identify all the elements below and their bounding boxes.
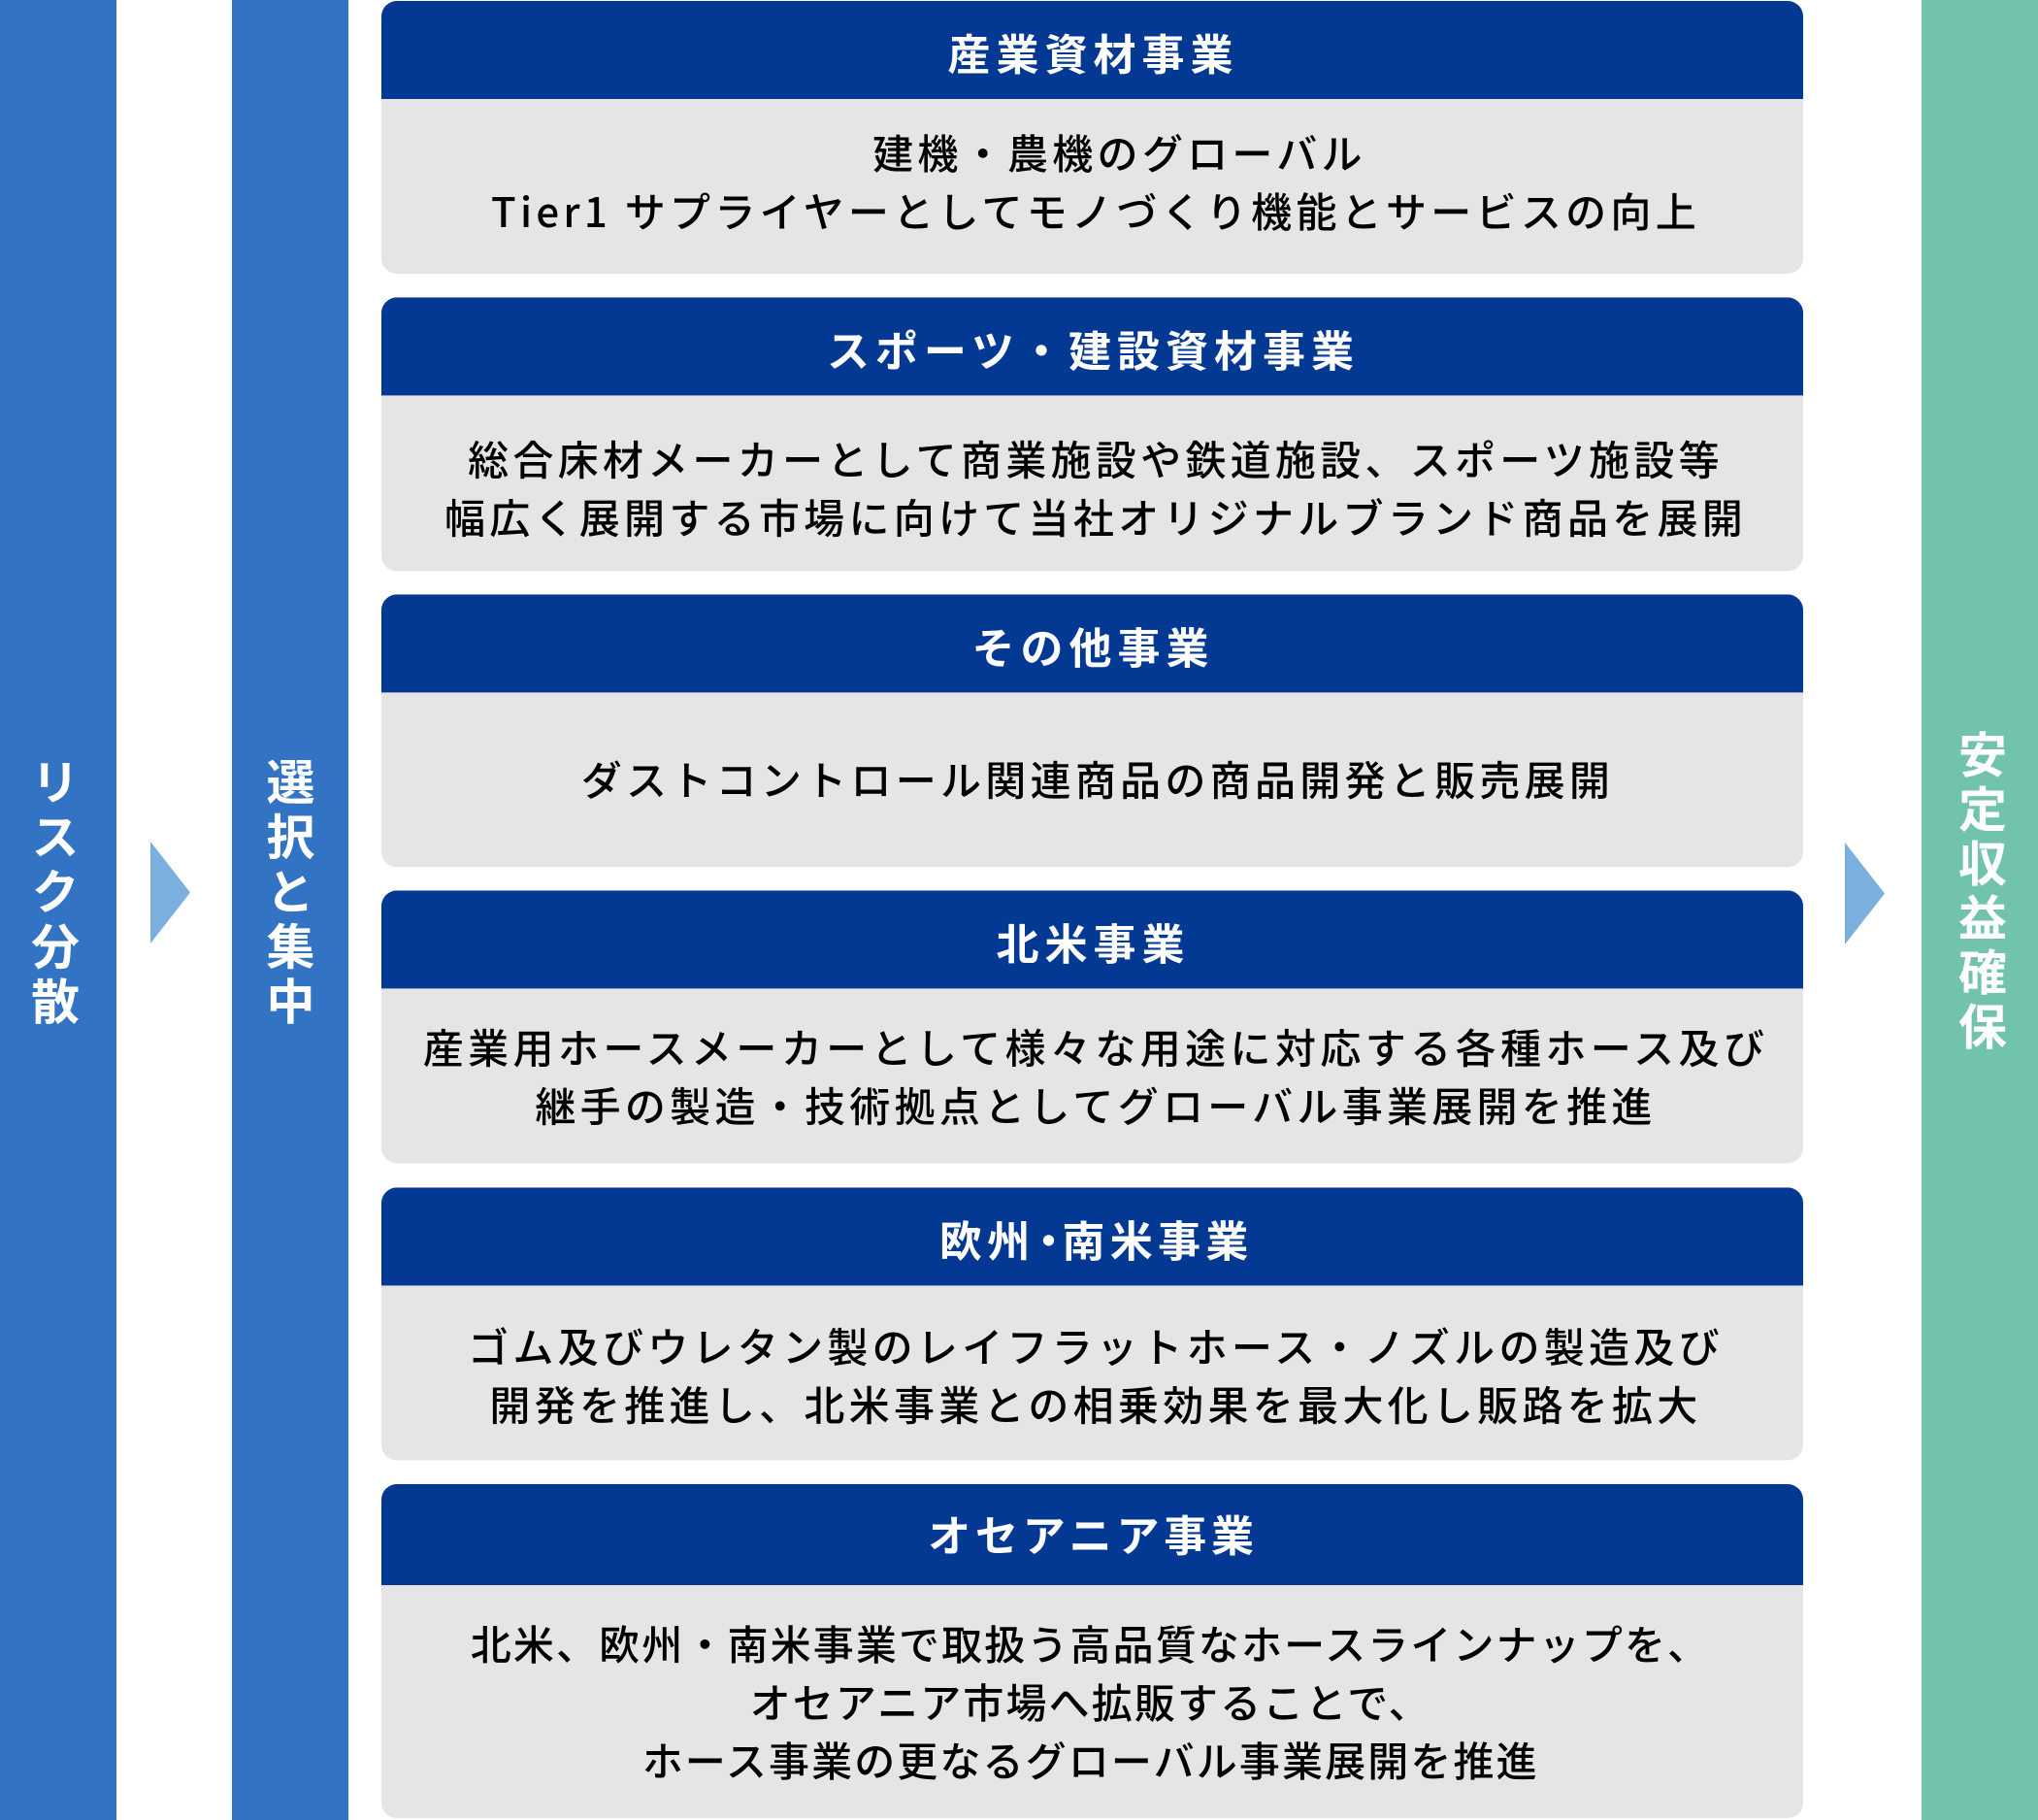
- heading: north america: [381, 890, 1803, 988]
- heading: industrial materials: 産業資材事業: [947, 20, 1238, 83]
- panel: industrial materials: [381, 1, 1803, 274]
- left bar: risk diversification: [0, 0, 116, 1820]
- panel: other businesses: [381, 594, 1803, 867]
- heading: oceania: オセアニア事業: [928, 1502, 1259, 1564]
- heading: industrial materials: [381, 1, 1803, 99]
- text: europe and south america: [468, 1315, 1724, 1433]
- arrow: right: [1845, 843, 1885, 944]
- text: europe and south america: ゴム及びウレタン製のレイフラットホース・ノズルの製造及び: [468, 1315, 1724, 1374]
- panel: north america: [381, 890, 1803, 1163]
- heading: europe and south america: 欧州・南米事業: [939, 1207, 1254, 1269]
- text: europe and south america: 開発を推進し、北米事業との相乗効果を最大化し販路を拡大: [489, 1373, 1702, 1433]
- text: sports and construction materials: [444, 428, 1747, 546]
- heading: sports and construction materials: [381, 297, 1803, 395]
- text: oceania: オセアニア市場へ拡販することで、: [750, 1671, 1431, 1731]
- text: oceania: [471, 1613, 1710, 1789]
- text: other businesses: ダストコントロール関連商品の商品開発と販売展開: [581, 748, 1614, 808]
- text: sports and construction materials: 幅広く展開する市場に向けて当社オリジナルブランド商品を展開: [444, 486, 1747, 546]
- label: risk diversification: リスク分散: [20, 757, 90, 1031]
- label: stable earnings: 安定収益確保: [1948, 730, 2018, 1056]
- arrow: left: [150, 842, 190, 943]
- text: oceania: ホース事業の更なるグローバル事業展開を推進: [642, 1730, 1539, 1789]
- heading: other businesses: その他事業: [972, 613, 1215, 676]
- text: industrial materials: Tier1 サプライヤーとしてモノづくり機能とサービスの向上: [491, 181, 1700, 240]
- text: industrial materials: [491, 122, 1700, 240]
- panel: europe and south america: [381, 1187, 1803, 1460]
- middle bar: selection and focus: [232, 0, 348, 1820]
- label: selection and focus: 選択と集中: [256, 757, 326, 1031]
- text: north america: 継手の製造・技術拠点としてグローバル事業展開を推進: [535, 1075, 1657, 1134]
- panel: oceania: [381, 1484, 1803, 1818]
- text: north america: [423, 1016, 1768, 1134]
- text: oceania: 北米、欧州・南米事業で取扱う高品質なホースラインナップを、: [471, 1613, 1710, 1672]
- panel: sports and construction materials: [381, 297, 1803, 571]
- right bar: stable earnings: [1922, 0, 2038, 1820]
- text: industrial materials: 建機・農機のグローバル: [872, 122, 1366, 182]
- heading: other businesses: [381, 594, 1803, 692]
- heading: north america: 北米事業: [996, 910, 1190, 972]
- text: north america: 産業用ホースメーカーとして様々な用途に対応する各種ホース及び: [423, 1016, 1768, 1075]
- heading: oceania: [381, 1484, 1803, 1585]
- heading: sports and construction materials: スポーツ・建設資材事業: [827, 316, 1360, 379]
- text: sports and construction materials: 総合床材メーカーとして商業施設や鉄道施設、スポーツ施設等: [468, 428, 1724, 487]
- heading: europe and south america: [381, 1187, 1803, 1285]
